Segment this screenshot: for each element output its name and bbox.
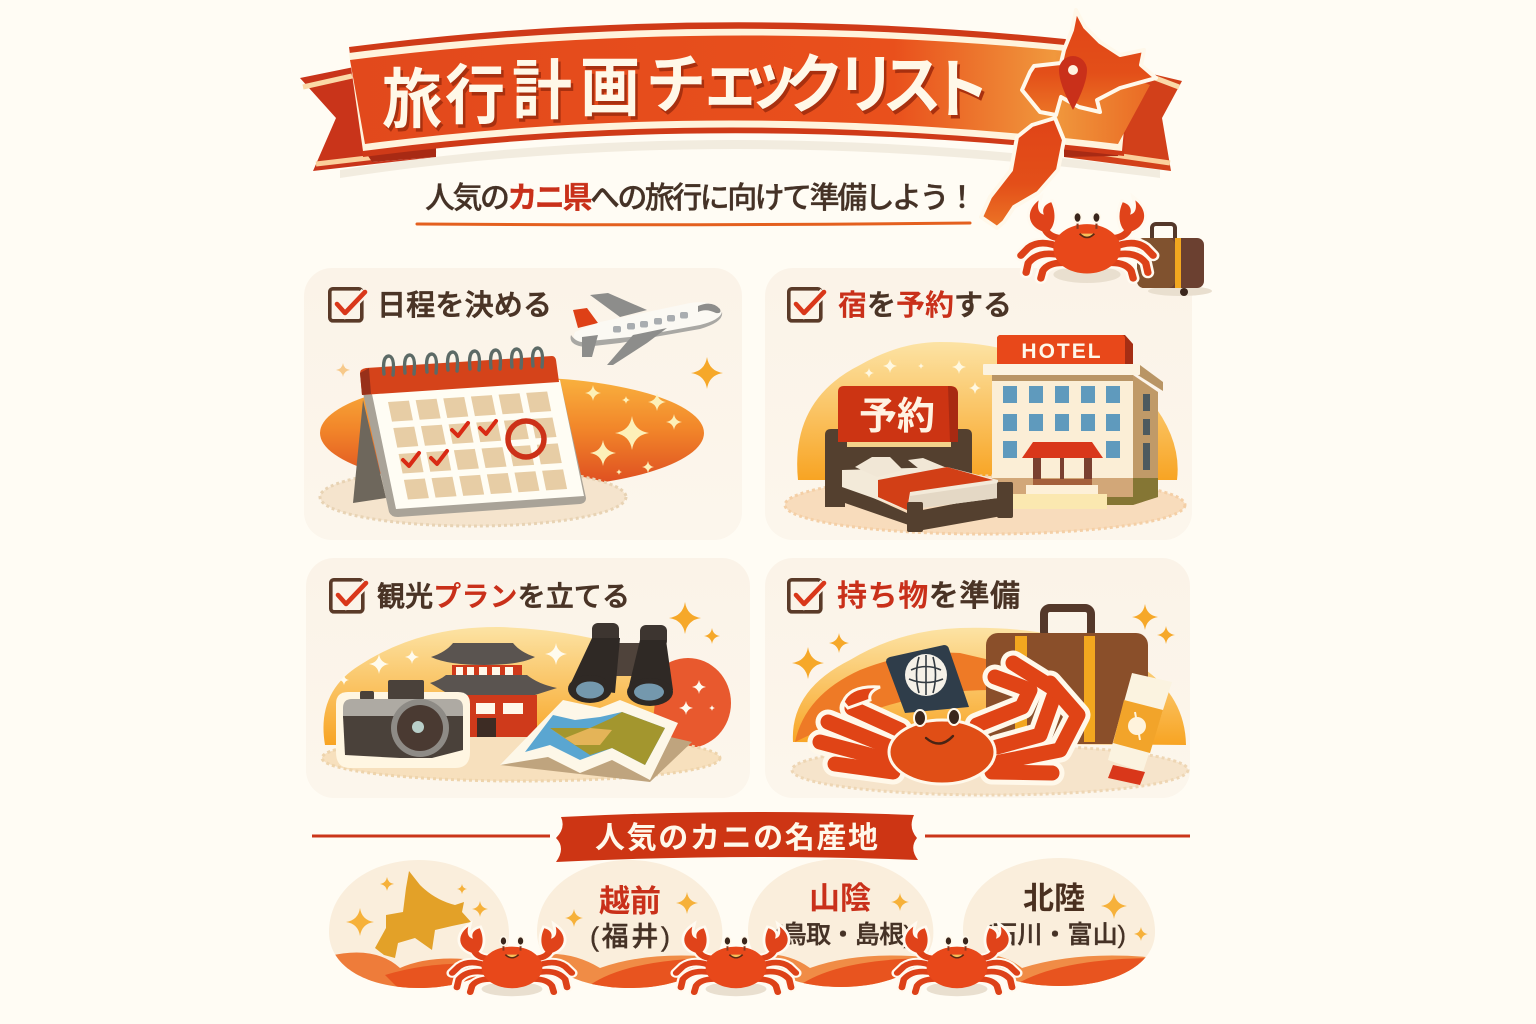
region prefectures: (石川・富山) xyxy=(984,921,1126,949)
panel: belongings xyxy=(765,558,1190,798)
panel: accommodation xyxy=(765,268,1192,540)
ground mat xyxy=(792,745,1188,795)
hotel entrance xyxy=(1013,442,1107,509)
title ribbon xyxy=(300,22,1182,178)
title text: 旅行計画チェックリスト xyxy=(382,45,990,137)
region name: 北陸 xyxy=(1023,881,1085,916)
ground mat xyxy=(322,735,720,781)
egg bands xyxy=(335,952,478,988)
card background xyxy=(304,268,742,540)
hotel sign: HOTEL xyxy=(1021,340,1103,363)
ribbon left tail xyxy=(300,67,436,171)
oval sparkles xyxy=(585,385,682,475)
crab with long legs xyxy=(820,645,1078,784)
red blob xyxy=(645,658,731,748)
airplane xyxy=(571,293,722,365)
crab 1 xyxy=(452,927,572,996)
small sparkle xyxy=(336,363,350,377)
sparkles xyxy=(346,877,488,936)
crab 2 xyxy=(676,927,796,996)
bed frame xyxy=(842,484,1013,530)
title text: 旅行計画チェックリスト xyxy=(384,48,993,140)
予約 sign xyxy=(838,386,958,447)
予約 sign: 予約 xyxy=(859,396,935,438)
region: San'in xyxy=(748,859,936,990)
checkbox xyxy=(789,289,824,321)
ribbon band xyxy=(349,22,1150,157)
egg bands xyxy=(775,955,918,987)
sparkles xyxy=(1101,893,1148,941)
orange dome xyxy=(793,628,1186,745)
suitcase beside crab xyxy=(1137,224,1212,296)
orange dome xyxy=(797,342,1178,480)
Hokkaido and north island xyxy=(1022,10,1156,115)
subtitle: 人気のカニ県への旅行に向けて準備しよう！ xyxy=(425,182,977,215)
temple xyxy=(430,643,557,737)
hotel side wall xyxy=(1133,375,1158,505)
region prefectures: (鳥取・島根) xyxy=(774,921,912,949)
crab mascot xyxy=(1021,200,1153,283)
sunscreen tube xyxy=(1108,673,1172,785)
orange dome xyxy=(323,627,660,745)
sparkle xyxy=(891,893,909,911)
region name: 山陰 xyxy=(809,881,871,916)
card background xyxy=(765,558,1190,798)
panel: sightseeing xyxy=(306,558,750,798)
section divider lines xyxy=(312,834,1190,838)
region: Echizen xyxy=(537,860,725,990)
heading: 持ち物を準備 xyxy=(837,580,1020,613)
crab 3 xyxy=(897,927,1017,996)
headboard frame xyxy=(825,429,972,507)
egg background xyxy=(329,860,509,988)
panel: schedule xyxy=(304,268,742,540)
Hokkaido map xyxy=(375,871,471,958)
egg background xyxy=(748,859,933,987)
red blanket xyxy=(878,467,993,510)
checkbox xyxy=(331,580,366,612)
heading: 観光プランを立てる xyxy=(377,581,630,612)
suitcase xyxy=(986,608,1148,744)
orange sparkles xyxy=(669,602,720,644)
card background xyxy=(306,558,750,798)
ground mat xyxy=(320,468,626,526)
ribbon right tail xyxy=(1064,72,1182,171)
section banner xyxy=(556,812,918,862)
map xyxy=(500,700,692,782)
check marks xyxy=(403,421,496,466)
ribbon shadow xyxy=(340,140,1160,178)
red circle xyxy=(508,421,544,457)
region prefecture: (福井) xyxy=(590,922,670,952)
sparkles xyxy=(864,359,981,394)
ground mat xyxy=(785,476,1185,534)
rings xyxy=(384,348,542,375)
egg background xyxy=(963,858,1155,986)
hotel windows xyxy=(1003,386,1120,458)
bed posts xyxy=(907,502,923,532)
egg background xyxy=(537,860,722,988)
egg bands xyxy=(980,954,1146,986)
hotel building xyxy=(983,335,1163,509)
orange sparkles xyxy=(792,604,1175,679)
date grid xyxy=(388,391,567,500)
section banner: 人気のカニの名産地 xyxy=(595,822,878,855)
hotel front wall xyxy=(992,375,1133,497)
egg bands xyxy=(551,954,697,988)
location pin xyxy=(1059,56,1087,110)
Japan map with pin xyxy=(981,10,1156,228)
passport xyxy=(886,645,969,713)
mattress xyxy=(842,467,998,510)
checkbox xyxy=(330,289,365,321)
calendar xyxy=(353,348,586,517)
region: Hokkaido xyxy=(329,860,510,990)
hotel sign xyxy=(997,335,1133,364)
subtitle underline xyxy=(417,223,970,225)
orange oval xyxy=(320,377,704,489)
sparkles xyxy=(565,892,698,927)
pillows xyxy=(855,457,903,477)
region name: 越前 xyxy=(599,884,661,919)
camera xyxy=(336,680,470,768)
checkbox xyxy=(789,580,824,612)
sparkle xyxy=(691,357,723,389)
region: Hokuriku xyxy=(963,858,1158,990)
card background xyxy=(765,268,1192,540)
binoculars xyxy=(568,623,673,706)
main island xyxy=(981,118,1064,228)
heading: 日程を決める xyxy=(377,289,552,322)
sparkles xyxy=(339,643,715,715)
heading: 宿を予約する xyxy=(838,289,1012,322)
hotel roof ledge xyxy=(983,364,1140,375)
bed xyxy=(825,386,1013,532)
